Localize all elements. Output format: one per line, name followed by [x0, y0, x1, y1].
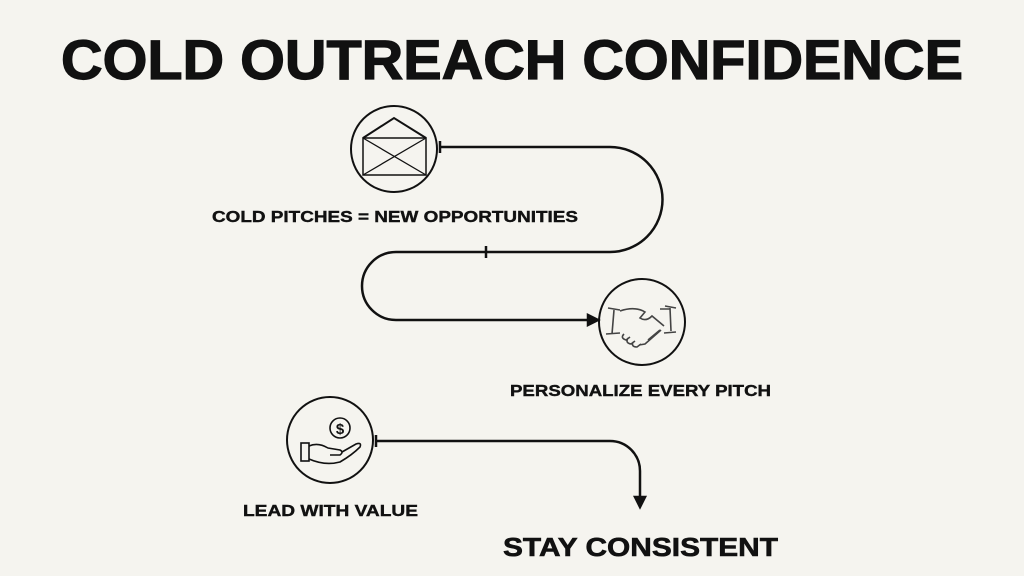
arrow: from hand to stay consistent [376, 435, 645, 507]
label: stay consistent: STAY CONSISTENT [503, 532, 778, 562]
label: personalize: PERSONALIZE EVERY PITCH [510, 383, 771, 400]
title: COLD OUTREACH CONFIDENCE [61, 28, 963, 91]
arrow: winding path from envelope to handshake [362, 141, 662, 325]
label: lead with value: LEAD WITH VALUE [243, 503, 418, 520]
icon: hand with coin [287, 397, 373, 483]
icon: envelope [351, 106, 437, 192]
label: cold pitches: COLD PITCHES = NEW OPPORTUNITIES [212, 209, 578, 226]
icon: hand with coin: $ [336, 421, 345, 438]
icon: handshake [599, 279, 685, 365]
